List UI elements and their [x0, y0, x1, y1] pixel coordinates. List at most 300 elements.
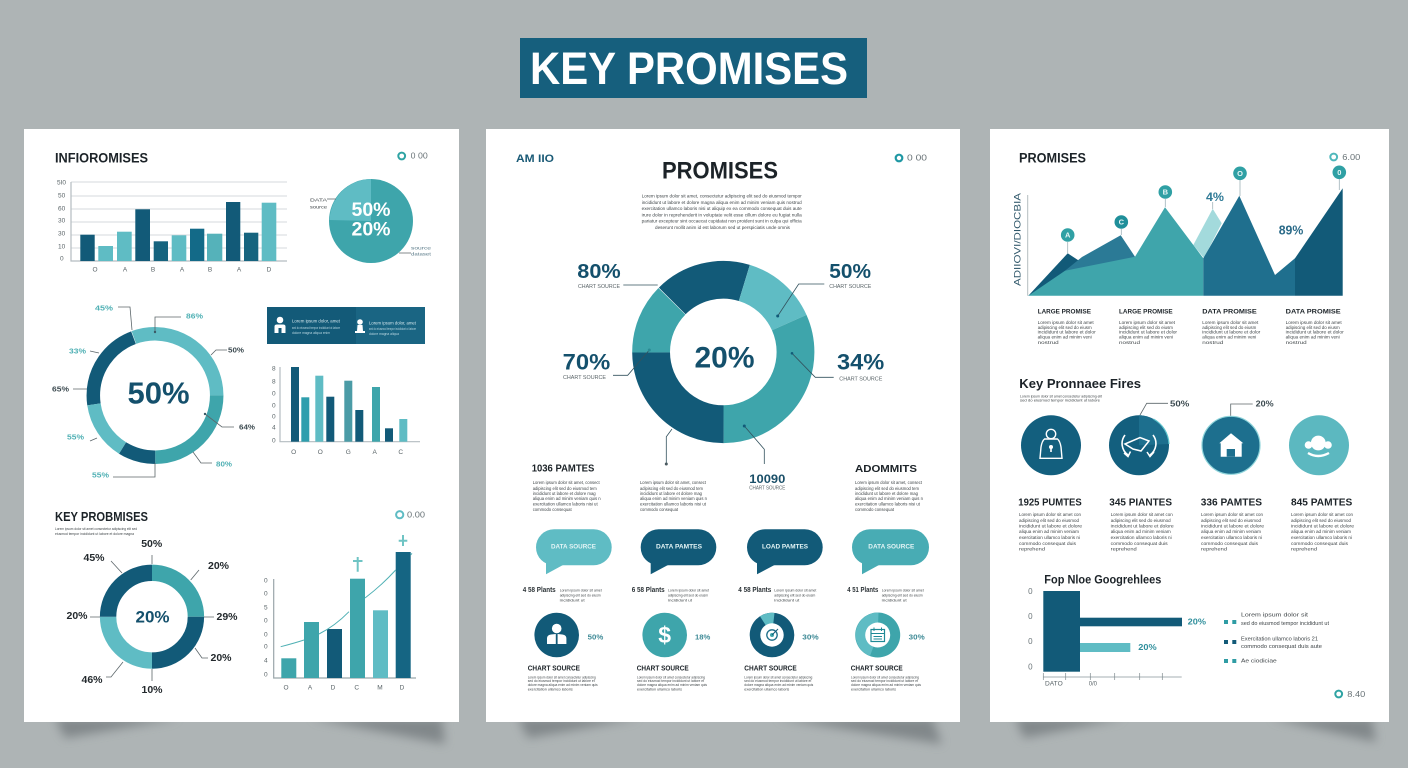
feature column 3: adipiscing elit sed do eiusmod — [1201, 518, 1261, 523]
ring chart: 50%: 50% — [127, 376, 190, 410]
column: admits: incididunt ut labore et dolore mag — [855, 491, 918, 496]
feature column 2: Lorem ipsum dolor sit amet con — [1111, 512, 1173, 517]
intro text block — [642, 194, 802, 230]
bar chart: top left: D — [267, 266, 272, 274]
horizontal bar chart: 20% — [1138, 643, 1157, 652]
feature column 1: reprehend — [1019, 546, 1046, 552]
column: 1036 plants: Lorem ipsum dolor sit amet, consect — [533, 480, 600, 485]
feature column 3: 336 PAMTES — [1201, 496, 1262, 508]
icon: dollar circle: $ — [658, 622, 671, 648]
column: 1036 plants — [532, 464, 601, 512]
bar chart with trend line: 0 — [264, 590, 268, 598]
panel: centre page — [486, 129, 960, 722]
column: admits — [855, 463, 923, 512]
pin C — [1114, 215, 1128, 229]
stat row 4 — [847, 587, 925, 602]
bar chart: top left: O — [92, 266, 98, 274]
caption 1: dolore magna aliqua enim ad minim veniam quis — [528, 683, 598, 687]
pie chart: DATA — [310, 198, 328, 202]
stat row 4: incididunt ut — [882, 598, 908, 602]
caption 2: sed do eiusmod tempor incididunt ut labore et — [637, 679, 705, 683]
feature column 2: 345 PIANTES — [1109, 496, 1172, 508]
callout: 34%: 34% — [837, 350, 884, 374]
bar chart with trend line: A — [308, 684, 313, 692]
intro text block: irure dolor in reprehenderit in voluptate velit esse cillum dolore eu fugiat nulla — [642, 212, 802, 218]
bar chart: middle right: 0 — [272, 414, 276, 420]
feature column 2: adipiscing elit sed do eiusmod — [1111, 518, 1171, 523]
caption 4: CHART SOURCE — [851, 664, 903, 672]
bar chart with trend line: O — [283, 684, 289, 692]
bar chart: top left: 50 — [58, 192, 66, 200]
ring chart: 50%: 80% — [216, 460, 232, 468]
feature column 1: commodo consequat duis — [1019, 541, 1077, 546]
horizontal bar chart: 0/0 — [1089, 680, 1097, 688]
chart note 3: adipiscing elit sed do eiusm — [1202, 325, 1256, 330]
chart note 2: incididunt ut labore et dolor — [1119, 330, 1177, 334]
speech bubble 1: DATA SOURCE — [551, 544, 596, 550]
chart note 3: aliqua enim ad minim veni — [1202, 334, 1256, 340]
sub heading text: Lorem ipsum dolor sit amet consectetur adipiscing elit — [1020, 394, 1103, 398]
bar chart with trend line: 5 — [264, 604, 268, 612]
stat row 4: 4 51 Plants — [847, 587, 878, 594]
feature column 4: reprehend — [1291, 546, 1318, 552]
heading: lower left: KEY PROBMISES — [55, 510, 148, 524]
sub heading text: sed do eiusmod tempor incididunt ut labore — [1020, 399, 1100, 403]
horizontal bar chart — [1028, 587, 1206, 688]
horizontal bar chart: DATO — [1045, 680, 1063, 688]
chart note 2: nostrud — [1119, 340, 1141, 345]
bar chart with trend line: 0 — [264, 632, 268, 638]
feature column 4: commodo consequat duis — [1291, 541, 1349, 546]
callout: 70%: CHART SOURCE — [563, 375, 606, 381]
feature column 4: adipiscing elit sed do eiusmod — [1291, 518, 1351, 523]
caption 2 — [637, 664, 707, 692]
column: 1036 plants: aliqua enim ad minim veniam quis n — [533, 496, 601, 501]
column: text block: Lorem ipsum dolor sit amet, consect — [640, 480, 707, 485]
speech bubble 2: DATA PAMTES — [656, 544, 702, 550]
bar chart: middle right: 0 — [272, 402, 276, 410]
heading: key promise fires: Key Pronnaee Fires — [1019, 376, 1141, 391]
feature column 4: aliqua enim ad minim veniam — [1291, 529, 1351, 534]
chart note 1: incididunt ut labore et dolor — [1038, 330, 1096, 334]
pin B: B — [1163, 188, 1169, 196]
stat row 2: incididunt ut — [668, 598, 693, 602]
chart note 3: incididunt ut labore et dolor — [1202, 330, 1261, 334]
bar chart: top left: 30 — [58, 218, 66, 224]
chart note 2: LARGE PROMISE — [1119, 308, 1173, 316]
chart legend: commodo consequat duis aute — [1241, 644, 1322, 650]
feature column 1: Lorem ipsum dolor sit amet con — [1019, 512, 1081, 517]
bar chart: middle right: 8 — [272, 378, 276, 386]
callout: 50%: 50% — [829, 261, 871, 283]
speech bubble 1 — [536, 529, 612, 574]
pin A: A — [1065, 230, 1071, 240]
lower left text block: eiusmod tempor incididunt ut labore et dolore magna — [55, 532, 135, 536]
area chart — [1012, 166, 1346, 296]
stat row 2: adipiscing elit sed do eiusm — [668, 594, 708, 598]
callout: 20%: 20% — [1256, 400, 1274, 408]
pie chart: 20% — [351, 218, 391, 240]
column: 1036 plants: 1036 PAMTES — [532, 464, 595, 474]
page marker — [396, 510, 426, 520]
column: text block: adipiscing elit sed do eiusmod tem — [640, 486, 703, 491]
donut chart: 20%: 20% — [135, 608, 170, 626]
stat row 3: incididunt ut — [774, 598, 800, 602]
caption 4 — [851, 664, 921, 692]
chart note 2 — [1119, 308, 1177, 345]
pin O — [1233, 166, 1247, 180]
bar chart with trend line: 4 — [264, 658, 268, 664]
feature column 2: reprehend — [1111, 546, 1137, 552]
bar chart: middle right: 0 — [272, 390, 276, 398]
caption 1: Lorem ipsum dolor sit amet consectetur adipiscing — [528, 675, 596, 679]
stat: 10090: 10090 — [749, 472, 786, 486]
bar chart: top left: A — [180, 266, 185, 274]
bar chart: middle right: A — [373, 449, 378, 456]
feature column 1: adipiscing elit sed do eiusmod — [1019, 518, 1079, 523]
stat row 1: adipiscing elit sed do eiusm — [560, 594, 601, 598]
caption 4: sed do eiusmod tempor incididunt ut labore et — [851, 679, 919, 683]
pie chart: source — [310, 204, 328, 210]
caption 2: exercitation ullamco laboris — [637, 688, 682, 692]
bar chart with trend line: D — [400, 684, 405, 692]
pie chart: dataset — [411, 252, 432, 256]
chart note 1: LARGE PROMISE — [1038, 308, 1092, 316]
pin C: C — [1119, 218, 1125, 226]
stat row 1: incididunt ut — [560, 598, 586, 602]
stat row 4: Lorem ipsum dolor sit amet — [882, 589, 925, 593]
panel: right page — [990, 129, 1389, 722]
bar chart: middle right: 0 — [272, 438, 276, 444]
pie chart — [310, 179, 432, 263]
area chart: 4% — [1206, 190, 1224, 204]
ring chart: 50% — [52, 304, 255, 480]
bar chart: top left: B — [208, 266, 212, 274]
column: text block: commodo consequat — [640, 507, 679, 512]
intro text block: incididunt ut labore et dolore magna aliqua enim ad minim veniam quis nostrud — [642, 200, 802, 205]
bar chart: top left: 10 — [58, 244, 66, 250]
bar chart with trend line: 0 — [264, 578, 268, 584]
chart note 2: aliqua enim ad minim veni — [1119, 334, 1173, 340]
intro text block: Lorem ipsum dolor sit amet, consectetur adipiscing elit sed do eiusmod tempor — [642, 194, 802, 198]
heading: PROMISES: PROMISES — [662, 158, 778, 184]
stat row 4: adipiscing elit sed do eiusm — [882, 594, 923, 598]
bar chart with trend line: M — [377, 684, 383, 692]
donut chart: 20%: 29% — [216, 611, 238, 623]
bar chart: middle right: 4 — [272, 424, 276, 432]
page marker: 0 00 — [907, 154, 928, 162]
intro text block: deserunt mollit anim id est laborum sed ut perspiciatis unde omnis — [655, 225, 791, 230]
callout: 80% — [577, 261, 621, 290]
horizontal bar chart: 20% — [1188, 618, 1206, 626]
column: 1036 plants: incididunt ut labore et dolore mag — [533, 491, 596, 496]
page marker — [398, 152, 428, 160]
main donut chart — [563, 250, 884, 466]
donut chart: 20%: 50% — [141, 538, 163, 550]
bar chart: middle right: O — [318, 449, 323, 456]
stat row 2: Lorem ipsum dolor sit amet — [668, 589, 710, 593]
caption 3: dolore magna aliqua enim ad minim veniam quis — [744, 683, 813, 687]
bar chart: top left: A — [237, 266, 242, 274]
horizontal bar chart: 0 — [1028, 637, 1033, 646]
chart note 3 — [1202, 308, 1261, 345]
feature column 4: Lorem ipsum dolor sit amet con — [1291, 512, 1353, 517]
bar chart: middle right: C — [398, 449, 403, 456]
area chart: ADIIOVI/DIOCBIA — [1012, 193, 1022, 286]
area chart: 89% — [1279, 222, 1304, 238]
horizontal bar chart: 0 — [1028, 662, 1033, 672]
bar chart: top left: 30 — [58, 230, 66, 238]
feature column 1: aliqua enim ad minim veniam — [1019, 529, 1079, 534]
icon: dollar circle — [642, 613, 711, 657]
ring chart: 50%: 50% — [228, 346, 244, 354]
chart note 1: adipiscing elit sed do eiusm — [1038, 325, 1092, 330]
chart note 4 — [1286, 308, 1344, 345]
chart note 3: Lorem ipsum dolor sit amet — [1202, 320, 1259, 325]
column: admits: exercitation ullamco laboris nisi ut — [855, 502, 921, 506]
speech bubble 3: LOAD PAMTES — [762, 544, 808, 550]
speech bubble 3 — [747, 529, 823, 574]
pin A — [1061, 228, 1074, 242]
feature column 2: exercitation ullamco laboris ni — [1111, 535, 1172, 540]
chart note 1: aliqua enim ad minim veni — [1038, 334, 1092, 340]
caption 3: CHART SOURCE — [744, 664, 797, 672]
icon: person bust — [355, 319, 365, 333]
ring chart: 50%: 55% — [67, 432, 84, 442]
column: text block: incididunt ut labore et dolore mag — [640, 491, 702, 496]
bar chart with trend line: 0 — [264, 672, 268, 678]
pin B — [1158, 185, 1172, 199]
page marker — [1335, 690, 1366, 699]
pin 0 — [1332, 166, 1346, 179]
info banner: dolore magna aliqua — [369, 332, 400, 336]
feature column 4: 845 PAMTES — [1291, 496, 1352, 508]
info banner — [267, 307, 425, 344]
callout: 80%: CHART SOURCE — [578, 284, 620, 290]
column: admits: Lorem ipsum dolor sit amet, consect — [855, 480, 923, 485]
feature column 3: commodo consequat duis — [1201, 541, 1259, 546]
pin O: O — [1237, 169, 1243, 178]
info banner: sed do eiusmod tempor incididunt ut labore — [292, 326, 340, 330]
horizontal bar chart: 0 — [1028, 587, 1033, 596]
bar chart: middle right: 8 — [272, 366, 276, 372]
chart note 4: DATA PROMISE — [1286, 308, 1341, 316]
feature column 1: incididunt ut labore et dolore — [1019, 524, 1082, 528]
pie chart: 50% — [351, 199, 391, 221]
donut chart: 20%: 46% — [81, 674, 103, 686]
caption 4: exercitation ullamco laboris — [851, 688, 896, 692]
bar chart with trend line: 0 — [264, 644, 268, 650]
speech bubble 4: DATA SOURCE — [868, 544, 914, 550]
caption 4: Lorem ipsum dolor sit amet consectetur adipiscing — [851, 675, 919, 679]
bar chart with trend line — [264, 535, 416, 692]
column: text block: aliqua enim ad minim veniam quis n — [640, 496, 707, 501]
feature column 3: aliqua enim ad minim veniam — [1201, 529, 1261, 534]
bar chart: top left — [57, 180, 287, 274]
feature column 4: incididunt ut labore et dolore — [1291, 524, 1354, 528]
speech bubble 2 — [641, 529, 716, 574]
page marker — [1330, 153, 1361, 162]
bar chart: top left: A — [123, 266, 128, 274]
column: text block: exercitation ullamco laboris nisi ut — [640, 502, 707, 506]
stat row 3 — [738, 587, 817, 602]
callout: 34%: CHART SOURCE — [839, 376, 883, 382]
column: admits: aliqua enim ad minim veniam quis n — [855, 496, 923, 501]
column: admits: commodo consequat — [855, 507, 895, 512]
feature column 4 — [1291, 496, 1354, 552]
caption 1 — [528, 664, 598, 692]
feature column 3: reprehend — [1201, 546, 1228, 552]
bar chart: top left: B — [151, 266, 155, 274]
feature column 2: commodo consequat duis — [1111, 541, 1168, 546]
chart note 3: nostrud — [1202, 340, 1224, 345]
pin 0: 0 — [1337, 168, 1341, 177]
donut chart: 20%: 20% — [66, 610, 88, 622]
column: text block — [640, 480, 707, 512]
title: KEY PROMISES — [530, 43, 848, 94]
stat row 3: Lorem ipsum dolor sit amet — [774, 589, 817, 593]
chart note 1: nostrud — [1038, 340, 1059, 345]
bar chart: top left: 0 — [60, 256, 64, 262]
icon: calendar donut: 30% — [909, 634, 926, 642]
caption 1: sed do eiusmod tempor incididunt ut labore et — [528, 679, 596, 683]
callout: 70%: 70% — [563, 350, 610, 374]
feature column 3 — [1201, 496, 1264, 552]
icon: person circle — [534, 613, 604, 657]
chart legend: Ae ciodiciae — [1241, 658, 1277, 664]
icon: people circle — [1289, 415, 1349, 475]
chart note 4: adipiscing elit sed do eiusm — [1286, 325, 1340, 330]
caption 2: CHART SOURCE — [637, 664, 689, 672]
feature column 2: aliqua enim ad minim veniam — [1111, 529, 1171, 534]
caption 3: exercitation ullamco laboris — [744, 688, 789, 692]
bar chart with trend line: C — [354, 684, 359, 692]
stat row 3: 4 58 Plants — [738, 587, 771, 594]
feature column 3: incididunt ut labore et dolore — [1201, 524, 1264, 528]
chart note 1 — [1038, 308, 1096, 345]
icon: calendar donut — [855, 612, 926, 658]
caption 3: sed do eiusmod tempor incididunt ut labore et — [744, 679, 812, 683]
speech bubble 4 — [852, 529, 929, 574]
caption 1: exercitation ullamco laboris — [528, 688, 573, 692]
pie chart: source — [411, 246, 432, 250]
chart note 1: Lorem ipsum dolor sit amet — [1038, 320, 1094, 325]
feature column 1: 1925 PUMTES — [1018, 496, 1082, 508]
page marker: 0 00 — [411, 152, 428, 160]
stat row 2: 6 58 Plants — [632, 587, 665, 594]
chart note 2: adipiscing elit sed do eiusm — [1119, 325, 1173, 330]
icon: house circle — [1202, 400, 1274, 474]
lower left text block — [55, 527, 137, 536]
donut chart: 20% — [66, 538, 238, 696]
donut chart: 20%: 20% — [208, 560, 230, 572]
ring chart: 50%: 55% — [92, 470, 109, 480]
feature column 3: Lorem ipsum dolor sit amet con — [1201, 512, 1263, 517]
donut chart: 20%: 20% — [210, 652, 232, 664]
feature column 1: exercitation ullamco laboris ni — [1019, 535, 1080, 540]
icon: target donut — [750, 613, 820, 657]
ring chart: 50%: 65% — [52, 384, 69, 394]
stat row 3: adipiscing elit sed do eiusm — [774, 594, 815, 598]
caption 1: CHART SOURCE — [528, 664, 580, 672]
chart legend: sed do eiusmod tempor incididunt ut — [1241, 621, 1329, 627]
page marker: 0.00 — [407, 510, 426, 520]
chart note 4: nostrud — [1286, 340, 1307, 345]
horizontal bar chart: 0 — [1028, 612, 1033, 621]
caption 2: Lorem ipsum dolor sit amet consectetur adipiscing — [637, 675, 705, 679]
heading: left page: INFIOROMISES — [55, 150, 148, 166]
callout: 80%: 80% — [577, 261, 621, 283]
icon: exchange circle — [1109, 400, 1189, 475]
feature column 2: incididunt ut labore et dolore — [1111, 524, 1174, 528]
bar chart: middle right: G — [346, 449, 351, 456]
caption 3 — [744, 664, 813, 692]
chart note 3: DATA PROMISE — [1202, 308, 1257, 316]
panel: left page — [24, 129, 459, 722]
feature column 1 — [1018, 496, 1082, 552]
heading: horizontal chart: Fop Nloe Googrehlees — [1044, 572, 1162, 586]
stat row 1: 4 58 Plants — [523, 587, 556, 594]
column: 1036 plants: exercitation ullamco laboris nisi ut — [533, 502, 598, 506]
intro text block: pariatur excepteur sint occaecat cupidatat non proident sunt in culpa qui officia — [642, 218, 802, 224]
callout: 50%: CHART SOURCE — [829, 284, 872, 290]
caption 3: Lorem ipsum dolor sit amet consectetur adipiscing — [744, 675, 812, 679]
info banner: dolore magna aliqua enim — [292, 331, 330, 335]
chart note 4: Lorem ipsum dolor sit amet — [1286, 320, 1342, 325]
bar chart with trend line: D — [331, 684, 336, 692]
icon: dollar circle: 18% — [695, 634, 711, 642]
column: 1036 plants: adipiscing elit sed do eiusmod tem — [533, 486, 597, 491]
feature column 2 — [1109, 496, 1174, 552]
sub heading text — [1020, 394, 1103, 403]
ring chart: 50%: 45% — [95, 304, 113, 312]
icon: person — [274, 317, 286, 333]
stat: 10090 — [749, 472, 786, 492]
stat row 2 — [632, 587, 710, 602]
tag: AM IIO: AM IIO — [516, 153, 554, 165]
caption 2: dolore magna aliqua enim ad minim veniam quis — [637, 683, 707, 687]
donut chart: 20%: 45% — [83, 552, 105, 564]
info banner: Lorem ipsum dolor, amet — [292, 318, 341, 324]
caption 4: dolore magna aliqua enim ad minim veniam quis — [851, 683, 921, 687]
feature column 3: exercitation ullamco laboris ni — [1201, 535, 1262, 540]
page marker — [896, 154, 928, 162]
column: admits: ADOMMITS — [855, 463, 917, 475]
bar chart: top left: 60 — [58, 206, 66, 212]
chart note 4: incididunt ut labore et dolor — [1286, 330, 1344, 334]
ring chart: 50%: 64% — [239, 422, 255, 432]
info banner: sed do eiusmod tempor incididunt ut labore — [369, 327, 416, 331]
bar chart with trend line: 0 — [264, 618, 268, 624]
bar chart: middle right — [272, 366, 420, 456]
chart legend — [1224, 613, 1329, 664]
intro text block: exercitation ullamco laboris nisi ut aliquip ex ea commodo consequat duis aute — [642, 206, 802, 211]
main donut chart: 20% — [694, 342, 755, 374]
ring chart: 50%: 33% — [69, 346, 86, 356]
feature column 4: exercitation ullamco laboris ni — [1291, 535, 1352, 540]
bar chart: middle right: O — [291, 449, 296, 456]
stat row 1: Lorem ipsum dolor sit amet — [560, 589, 603, 593]
chart note 2: Lorem ipsum dolor sit amet — [1119, 320, 1176, 325]
lower left text block: Lorem ipsum dolor sit amet consectetur adipiscing elit sed — [55, 527, 137, 531]
icon: lock bag circle — [1021, 415, 1081, 475]
info banner: Lorem ipsum dolor, amet — [369, 320, 417, 326]
icon: target donut: 30% — [802, 634, 820, 642]
icon: person circle: 50% — [588, 634, 604, 642]
stat row 1 — [523, 587, 603, 602]
callout: 50%: 50% — [1170, 400, 1189, 408]
chart legend: Lorem ipsum dolor sit — [1241, 613, 1309, 619]
